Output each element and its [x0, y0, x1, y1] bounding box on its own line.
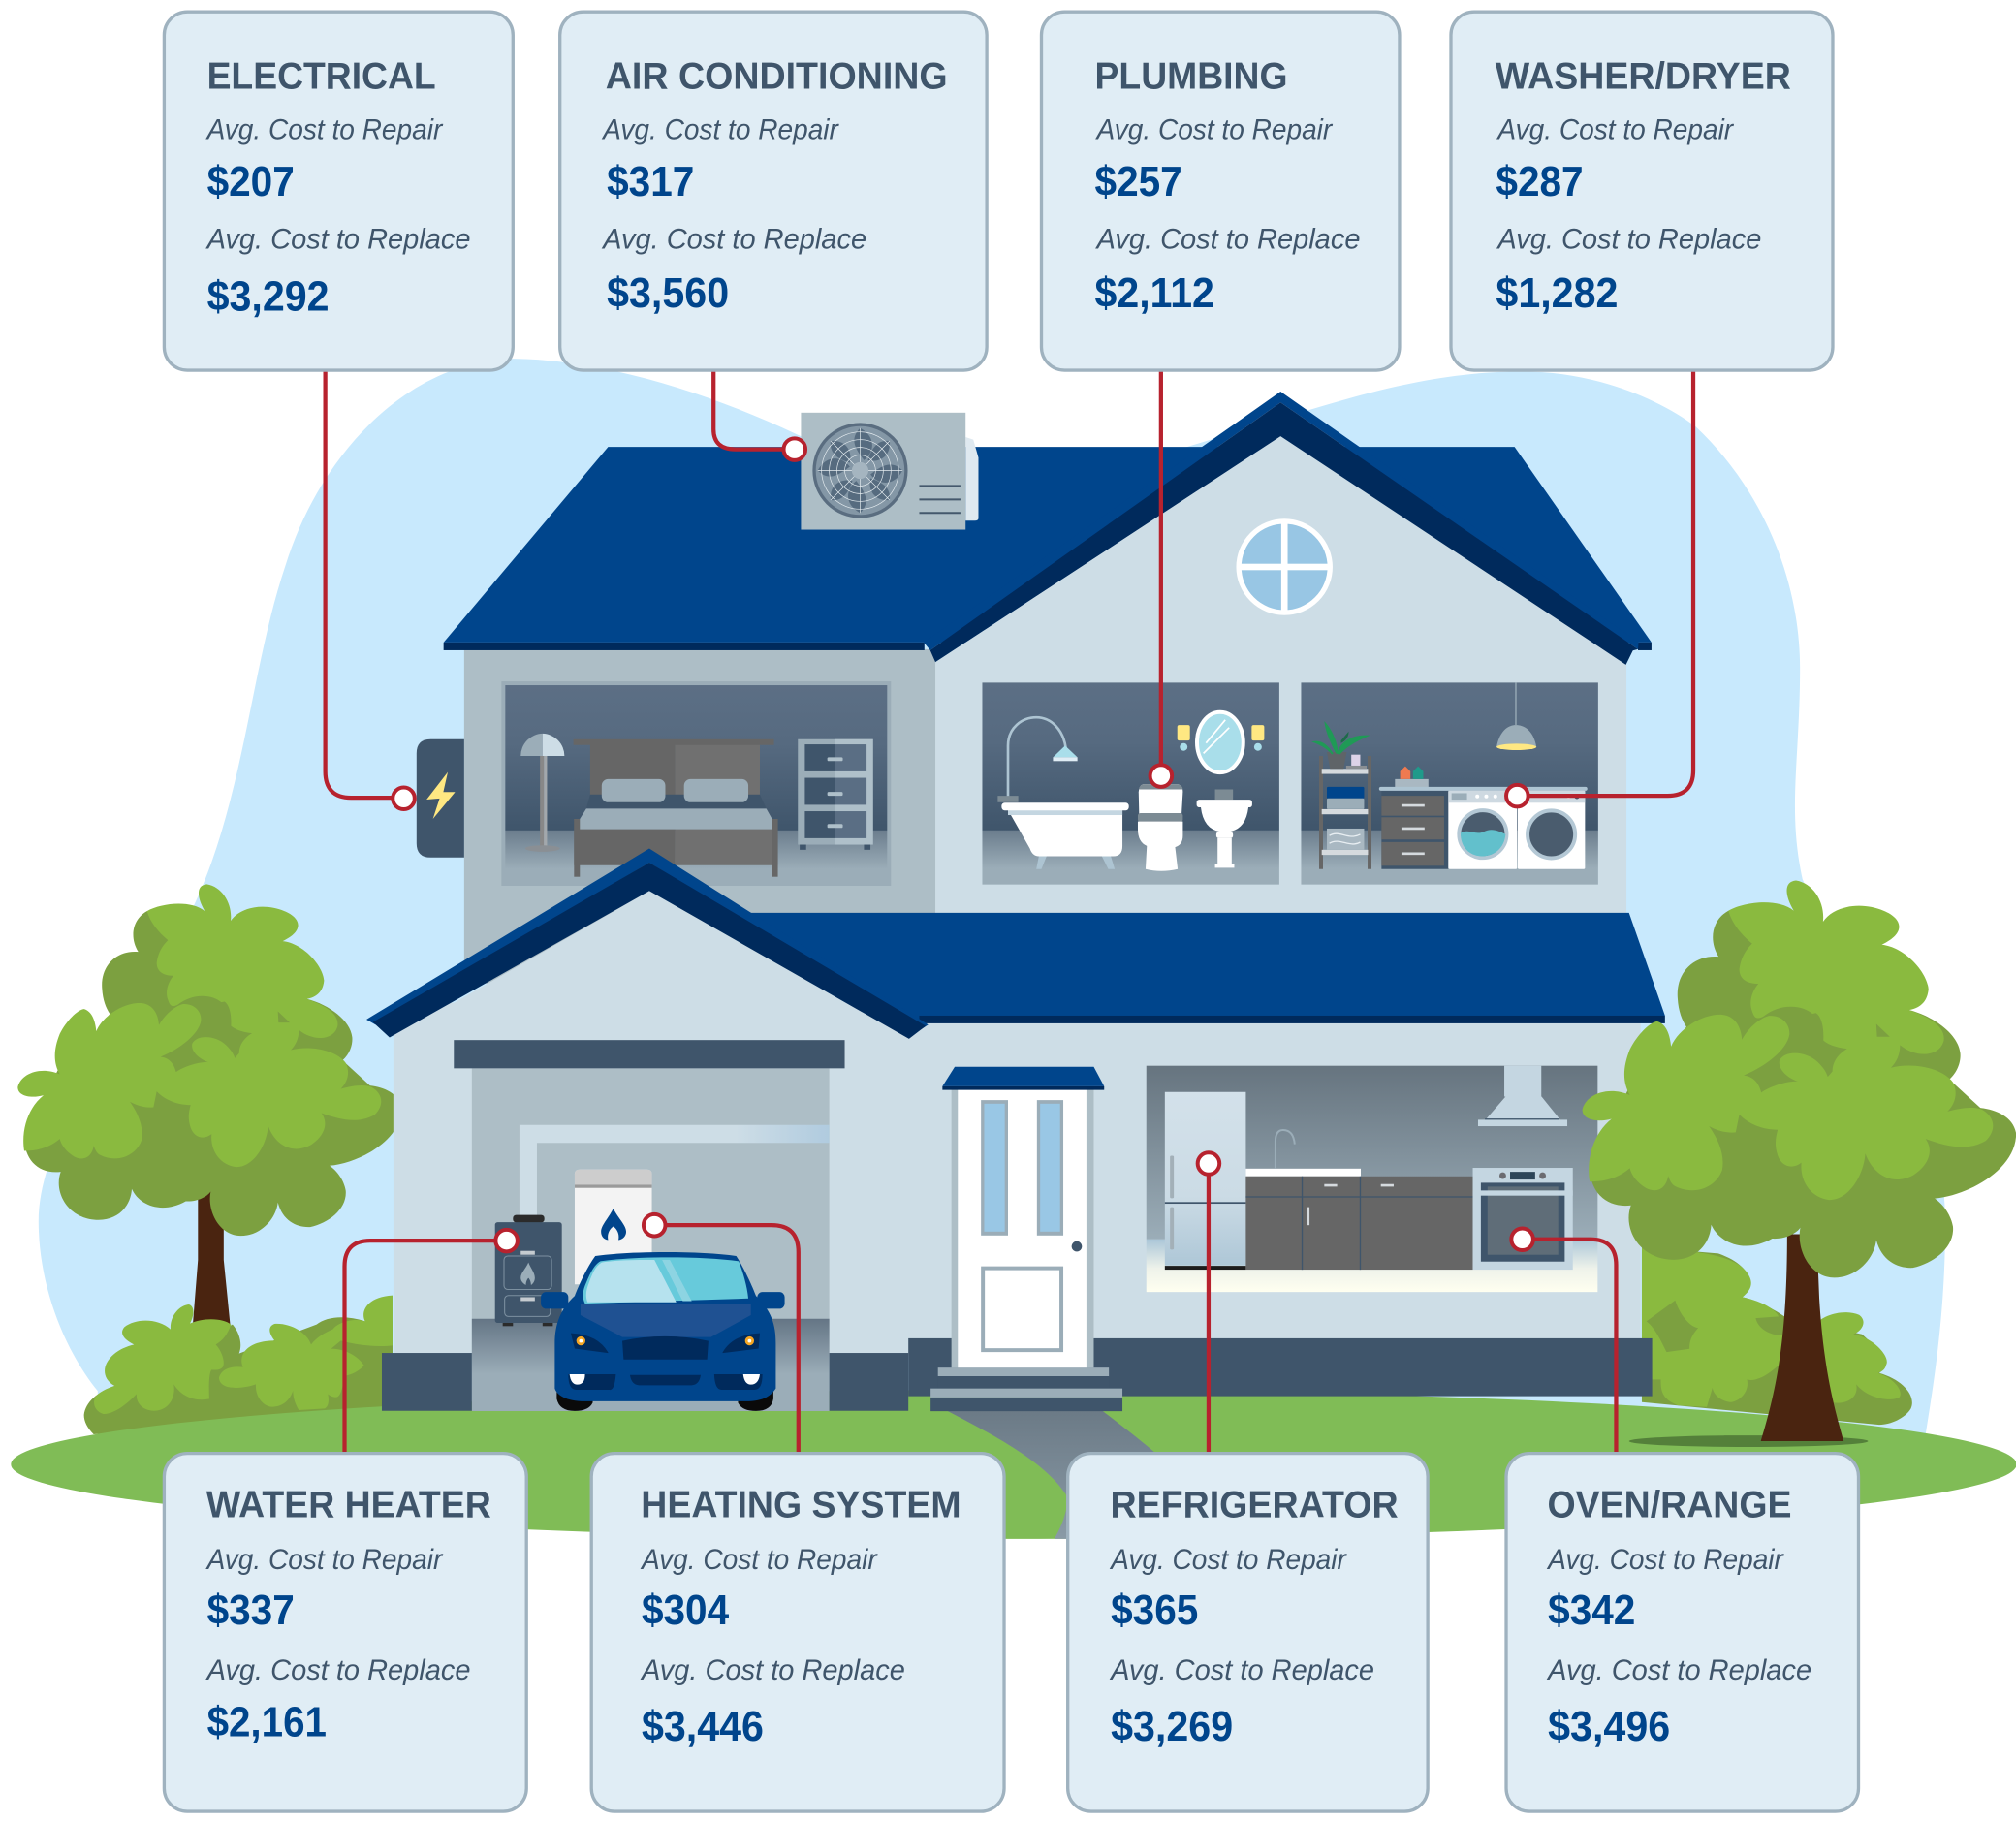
card: refrigerator	[1068, 1454, 1428, 1811]
soap bottles	[1395, 767, 1429, 788]
card: air conditioning: Avg. Cost to Repair	[601, 113, 839, 145]
shelving	[1319, 755, 1371, 869]
card: air conditioning: $3,560	[607, 270, 729, 317]
card: water heater: $2,161	[207, 1699, 327, 1745]
card: refrigerator: REFRIGERATOR	[1110, 1484, 1399, 1525]
lower bumper vents	[568, 1374, 763, 1390]
furnace	[495, 1215, 562, 1326]
card: air conditioning	[560, 12, 987, 370]
connector: water heater	[345, 1230, 518, 1453]
hood	[581, 1304, 751, 1337]
pedestal sink	[1197, 789, 1252, 867]
lower long roof	[740, 913, 1665, 1028]
card: washer dryer: WASHER/DRYER	[1496, 56, 1791, 98]
card: electrical: ELECTRICAL	[207, 56, 436, 98]
dresser	[798, 739, 873, 850]
air conditioning unit	[801, 413, 978, 530]
range hood	[1478, 1066, 1567, 1126]
card: oven range: $3,496	[1548, 1704, 1670, 1750]
front steps	[930, 1367, 1122, 1411]
garage gable wall	[394, 891, 909, 1157]
card: heating system: $304	[642, 1587, 729, 1634]
card: air conditioning: Avg. Cost to Replace	[601, 224, 866, 256]
connector: heating system	[644, 1214, 799, 1453]
bathroom	[982, 682, 1279, 885]
card: electrical: $3,292	[207, 273, 330, 320]
walkway	[946, 1410, 1286, 1539]
kitchen counter and cabinets	[1245, 1130, 1473, 1270]
laundry room	[1301, 682, 1598, 885]
connector: electrical	[326, 370, 415, 809]
windshield	[583, 1257, 748, 1304]
garage	[382, 1040, 908, 1411]
card: heating system	[591, 1454, 1004, 1811]
toilet	[1138, 784, 1182, 871]
wheels	[556, 1386, 773, 1411]
right tree	[1583, 880, 2016, 1447]
card: plumbing: Avg. Cost to Repair	[1095, 113, 1333, 145]
cabinet with drawers	[1381, 791, 1448, 869]
garage gable roof trim	[366, 849, 929, 1039]
card: electrical	[164, 12, 513, 370]
left bushes	[84, 1296, 393, 1434]
connector: air conditioning	[713, 370, 805, 460]
water heater tank	[575, 1170, 652, 1284]
card: electrical: $207	[207, 159, 295, 205]
card: oven range	[1506, 1454, 1859, 1811]
wall sconces	[1178, 725, 1264, 751]
mirror	[1197, 712, 1244, 772]
card: plumbing: $2,112	[1095, 270, 1214, 317]
car	[541, 1252, 785, 1411]
ground lawn	[11, 1390, 2016, 1539]
kitchen	[1147, 1066, 1597, 1292]
card: refrigerator: $365	[1111, 1587, 1198, 1634]
card: heating system: Avg. Cost to Replace	[640, 1654, 905, 1686]
card: heating system: HEATING SYSTEM	[641, 1484, 961, 1525]
dryer	[1518, 791, 1585, 869]
card: water heater: WATER HEATER	[206, 1484, 491, 1525]
refrigerator	[1165, 1092, 1245, 1270]
headlights	[571, 1334, 760, 1353]
card: air conditioning: $317	[607, 159, 694, 205]
card: washer dryer: Avg. Cost to Replace	[1496, 224, 1761, 256]
connector: refrigerator	[1198, 1152, 1219, 1453]
card: washer dryer: $287	[1496, 159, 1584, 205]
card: heating system: Avg. Cost to Repair	[640, 1544, 878, 1576]
counter	[1379, 787, 1588, 791]
card: washer dryer: $1,282	[1496, 270, 1618, 317]
potted plant	[1311, 721, 1370, 769]
bathtub and shower	[997, 717, 1129, 869]
upper right gable wall	[935, 436, 1626, 938]
card: water heater: $337	[207, 1587, 295, 1634]
foundation	[908, 1338, 1653, 1397]
electrical box	[417, 739, 464, 858]
card: refrigerator: $3,269	[1111, 1704, 1233, 1750]
right bushes	[1642, 1247, 1912, 1425]
card: washer dryer: Avg. Cost to Repair	[1496, 113, 1734, 145]
card: refrigerator: Avg. Cost to Replace	[1109, 1654, 1374, 1686]
card: plumbing: Avg. Cost to Replace	[1095, 224, 1360, 256]
oven	[1473, 1168, 1573, 1270]
card: refrigerator: Avg. Cost to Repair	[1109, 1544, 1347, 1576]
front door	[942, 1067, 1104, 1367]
connector: washer dryer	[1506, 370, 1693, 806]
round attic window	[1239, 521, 1330, 613]
washer	[1448, 791, 1517, 869]
side mirrors	[541, 1292, 785, 1308]
main roof	[444, 447, 1652, 650]
card: washer dryer	[1451, 12, 1833, 370]
card: electrical: Avg. Cost to Replace	[205, 224, 471, 256]
card: oven range: Avg. Cost to Replace	[1546, 1654, 1811, 1686]
upper left wall	[464, 649, 936, 984]
card: water heater: Avg. Cost to Repair	[205, 1544, 443, 1576]
house	[366, 392, 1665, 1411]
left tree	[17, 884, 401, 1324]
connector: plumbing	[1150, 370, 1172, 787]
card: plumbing: $257	[1095, 159, 1182, 205]
card: oven range: OVEN/RANGE	[1547, 1484, 1792, 1525]
bedroom	[501, 681, 891, 886]
grille	[622, 1336, 709, 1360]
lower wall	[394, 1003, 1641, 1356]
pendant lamp	[1496, 682, 1536, 750]
card: oven range: $342	[1548, 1587, 1635, 1634]
background sky blob	[39, 359, 1945, 1440]
card: air conditioning: AIR CONDITIONING	[606, 56, 948, 98]
card: heating system: $3,446	[642, 1704, 764, 1750]
card: plumbing: PLUMBING	[1095, 56, 1288, 98]
floor lamp	[520, 734, 564, 852]
card: electrical: Avg. Cost to Repair	[205, 113, 443, 145]
bed	[574, 739, 778, 877]
card: water heater: Avg. Cost to Replace	[205, 1654, 471, 1686]
card: oven range: Avg. Cost to Repair	[1546, 1544, 1784, 1576]
gable roof trim	[924, 392, 1639, 665]
connector: oven range	[1511, 1229, 1616, 1453]
card: plumbing	[1041, 12, 1400, 370]
card: water heater	[164, 1454, 526, 1811]
